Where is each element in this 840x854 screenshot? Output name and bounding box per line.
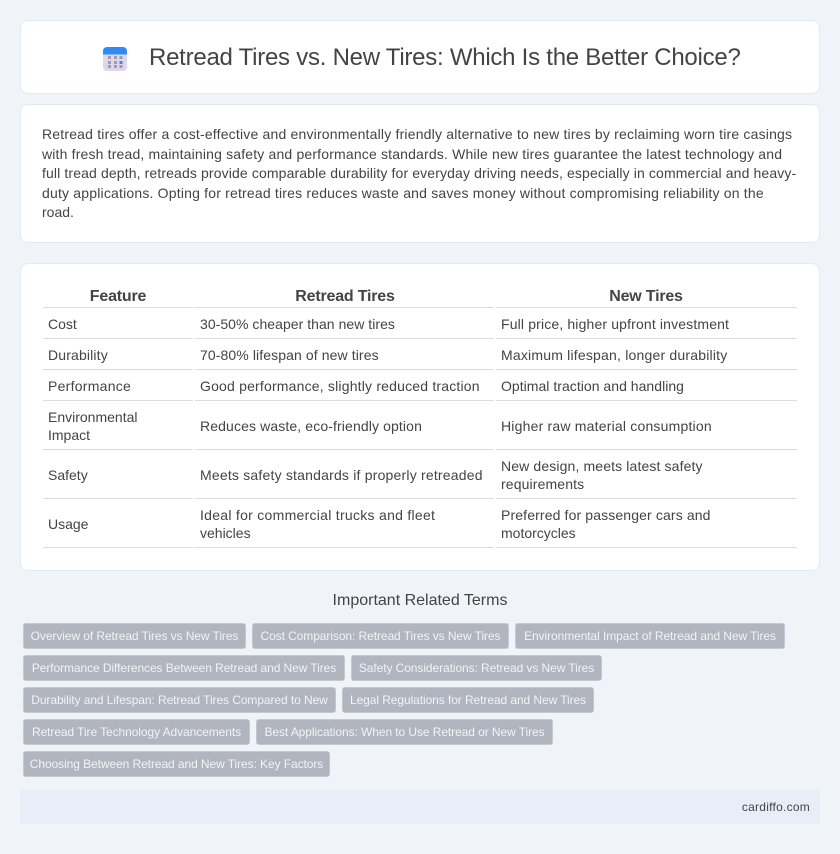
row: environmental impact: Higher raw material consumption [501,418,712,434]
row: environmental impact: Impact [48,427,90,443]
row: environmental impact: Reduces waste, eco-friendly option [200,418,422,434]
intro panel [20,104,820,243]
tag: Retread Tire Technology Advancements [32,725,241,739]
related terms heading: Important Related Terms [333,592,507,609]
tag: Choosing Between Retread and New Tires: Key Factors [30,757,323,771]
tag [256,719,553,745]
intro text: full tread depth, retreads provide comparable durability for everyday driving needs, especially in commercial and heavy- [42,165,796,181]
table header: Retread Tires [295,288,395,305]
tag [23,751,330,777]
row: cost: 30-50% cheaper than new tires [200,316,395,332]
tag [351,655,602,681]
row: environmental impact: Environmental [48,409,138,425]
tag: Durability and Lifespan: Retread Tires Compared to New [31,693,328,707]
footer source text: cardiffo.com [742,800,810,814]
tag: Best Applications: When to Use Retread or New Tires [264,725,545,739]
tag [23,687,336,713]
row: performance: Performance [48,378,131,394]
tag [515,623,785,649]
row: durability: Durability [48,347,108,363]
header panel [20,20,820,94]
row: environmental impact [48,409,712,443]
intro text [42,126,796,220]
row: performance: Optimal traction and handling [501,378,684,394]
tag [23,655,345,681]
intro text: road. [42,204,74,220]
row: cost [48,316,729,332]
row: safety: New design, meets latest safety [501,458,703,474]
related term tags [23,623,785,777]
row: usage: vehicles [200,525,251,541]
title: Retread Tires vs. New Tires: Which Is the Better Choice? [149,44,741,71]
row: safety: requirements [501,476,584,492]
row: cost: Full price, higher upfront investment [501,316,729,332]
intro text: duty applications. Opting for retread tires reduces waste and saves money without compromising reliability on the [42,184,764,200]
row: usage: Preferred for passenger cars and [501,507,711,523]
row: usage: Usage [48,516,88,532]
tag [252,623,509,649]
row: safety [48,458,703,492]
table header: New Tires [609,288,683,305]
row: performance: Good performance, slightly reduced traction [200,378,480,394]
row: durability [48,347,728,363]
tag [23,719,250,745]
row: performance [48,378,684,394]
row: safety: Meets safety standards if properly retreaded [200,467,483,483]
intro text: Retread tires offer a cost-effective and environmentally friendly alternative to new tires by reclaiming worn tire casings [42,126,792,142]
tag [342,687,594,713]
tag: Environmental Impact of Retread and New Tires [524,629,776,643]
row: durability: Maximum lifespan, longer durability [501,347,727,363]
table header [90,288,683,305]
row: usage: motorcycles [501,525,576,541]
row: usage: Ideal for commercial trucks and fleet [200,507,435,523]
intro text: with fresh tread, maintaining safety and performance standards. While new tires guarantee the latest technology and [42,146,782,162]
tag: Overview of Retread Tires vs New Tires [31,629,238,643]
tag [23,623,246,649]
icon: calendar [103,47,127,71]
tag: Cost Comparison: Retread Tires vs New Tires [260,629,500,643]
tag: Legal Regulations for Retread and New Tires [350,693,586,707]
table header: Feature [90,288,146,305]
tag: Safety Considerations: Retread vs New Tires [359,661,594,675]
row: usage [48,507,711,541]
row: durability: 70-80% lifespan of new tires [200,347,379,363]
tag: Performance Differences Between Retread and New Tires [32,661,336,675]
footer bar [20,790,820,824]
row: cost: Cost [48,316,77,332]
comparison table panel [20,263,820,571]
row: safety: Safety [48,467,88,483]
